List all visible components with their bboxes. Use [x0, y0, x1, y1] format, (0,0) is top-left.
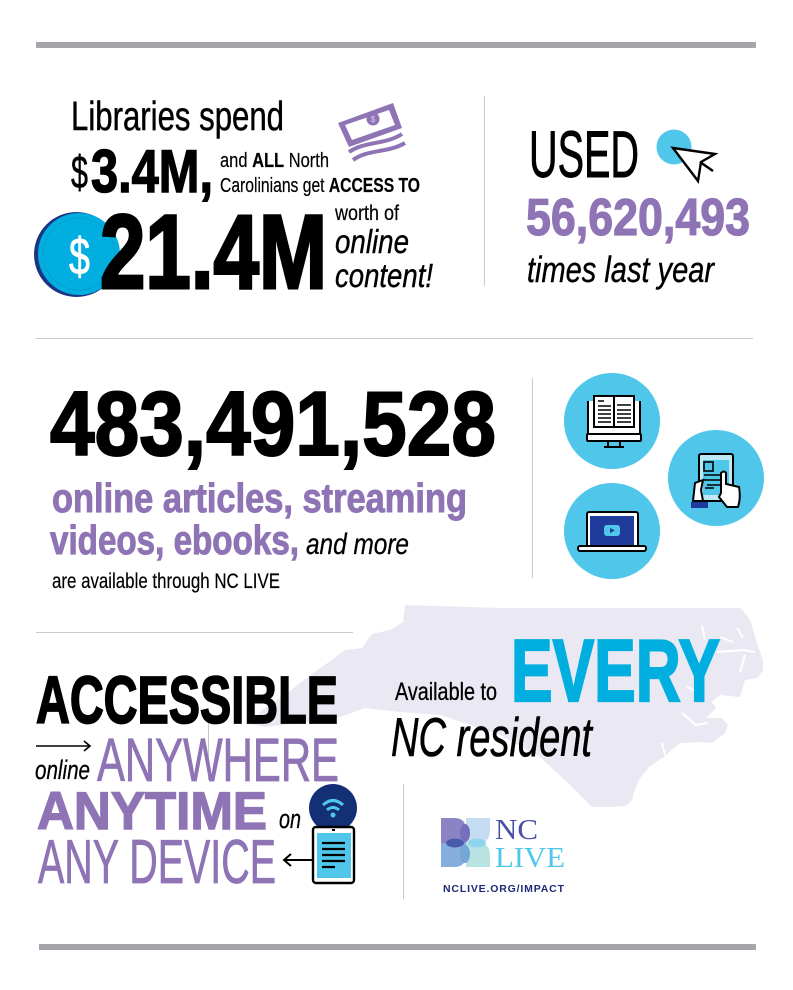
panel: library spending	[34, 93, 433, 311]
text: are available through nc live: are available through NC LIVE	[52, 570, 280, 593]
panel: usage	[526, 117, 750, 290]
text: worth of online content: content!	[335, 257, 433, 294]
text: any device: ANY DEVICE	[38, 828, 276, 897]
text: available to: Available to	[395, 678, 497, 706]
text: videos, ebooks, and more: videos, ebooks,	[50, 517, 299, 563]
icon: money stack	[338, 103, 405, 160]
text: anytime: ANYTIME	[37, 782, 267, 841]
map of North Carolina	[250, 605, 763, 807]
logo: nc live	[441, 814, 565, 895]
icon: money stack: $	[371, 115, 376, 124]
text: on: on	[279, 804, 301, 834]
icon: ebook on monitor	[564, 373, 660, 469]
text: $3.4M: 3.4M,	[91, 138, 213, 205]
arrow: device	[284, 854, 313, 866]
stat: 483,491,528: 483,491,528	[50, 374, 496, 475]
heading: used: USED	[529, 117, 639, 191]
icon: tablet	[313, 827, 354, 883]
text: online articles, streaming: online articles, streaming	[52, 475, 467, 521]
text: worth of online content: worth of	[334, 202, 399, 225]
text: videos, ebooks, and more: and more	[306, 528, 409, 561]
icon: dollar coin	[34, 212, 120, 297]
text: live: LIVE	[495, 842, 565, 874]
icon: logo mark	[441, 818, 490, 867]
panel: content available	[50, 374, 496, 593]
text: and all north carolinians get access to: Carolinians get ACCESS TO	[220, 175, 420, 197]
text: and all north carolinians get access to	[220, 150, 420, 197]
heading: libraries spend: Libraries spend	[71, 93, 284, 139]
heading: accessible: ACCESSIBLE	[36, 663, 338, 738]
arrow: online	[36, 741, 90, 751]
text: nc resident: NC resident	[391, 706, 594, 768]
text: url: NCLIVE.ORG/IMPACT	[443, 883, 565, 895]
text: times last year: times last year	[527, 249, 716, 290]
top rule	[36, 42, 756, 48]
icon: video on laptop	[564, 483, 660, 579]
text: 21.4M: 21.4M	[100, 194, 327, 311]
panel: accessible	[35, 663, 357, 897]
text: anywhere: ANYWHERE	[97, 726, 339, 794]
text: and all north carolinians get access to: and ALL North	[220, 150, 329, 172]
stat: 56,620,493: 56,620,493	[526, 189, 750, 247]
bottom rule	[39, 944, 756, 950]
panel: available to every nc resident	[391, 621, 720, 768]
icon: cursor click	[656, 130, 715, 181]
text: worth of online content: online	[335, 223, 409, 260]
icon: hand on tablet	[668, 430, 764, 526]
icon: wifi	[309, 784, 357, 832]
icon: dollar coin: $	[69, 228, 90, 286]
text: nc: NC	[495, 814, 538, 846]
text: worth of online content	[334, 202, 433, 294]
text: $3.4M: $	[71, 146, 88, 198]
text: online: online	[35, 755, 90, 785]
